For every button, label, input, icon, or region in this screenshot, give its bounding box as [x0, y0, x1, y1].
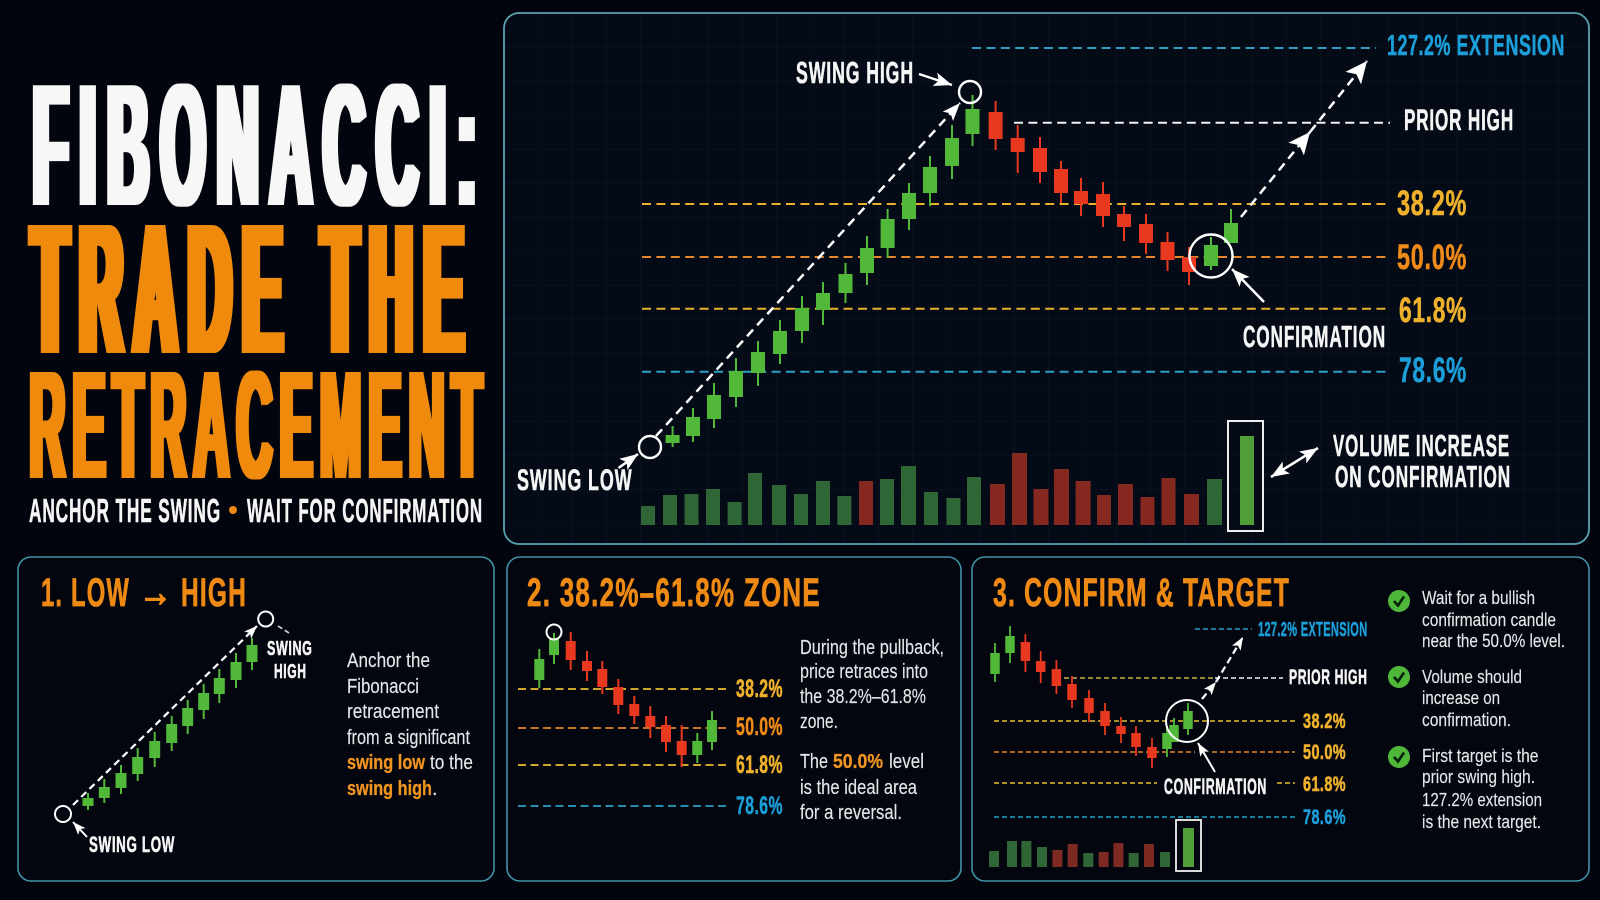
- swing high marker: SWING HIGH: [796, 55, 914, 90]
- text: TRADE THE: [32, 186, 475, 393]
- candlesticks: [673, 95, 1231, 447]
- candlesticks: [995, 626, 1188, 768]
- panel 3: confirm and target: [972, 557, 1589, 881]
- text: RETRACEMENT: [30, 339, 490, 511]
- level labels: [736, 675, 783, 820]
- description: swing high: [347, 778, 432, 800]
- check item 2: [1388, 666, 1522, 730]
- swing low marker: [517, 436, 661, 497]
- fibonacci level lines: [642, 48, 1390, 372]
- heading: →: [139, 571, 172, 615]
- text: FIBONACCI:: [33, 47, 488, 242]
- heading: 3. CONFIRM & TARGET: [993, 571, 1290, 615]
- level labels: 78.6%: [736, 792, 783, 820]
- dashed arrow: [73, 626, 257, 805]
- swing high marker: [546, 624, 562, 640]
- swing low marker: SWING LOW: [89, 832, 175, 857]
- description: to the: [430, 752, 473, 774]
- description: is the ideal area: [800, 777, 918, 799]
- checklist: [1388, 588, 1565, 832]
- level labels: 38.2%: [736, 675, 783, 703]
- level labels: 38.2%: [1303, 710, 1346, 733]
- confirmation marker: [1190, 234, 1386, 354]
- heading: HIGH: [181, 571, 247, 615]
- dashed arrow: confirmation to targets: [1241, 61, 1367, 217]
- candlesticks: [539, 632, 712, 767]
- description: [800, 637, 944, 824]
- swing high marker: SWING: [267, 638, 312, 660]
- level lines: [994, 629, 1295, 817]
- description: level: [889, 751, 924, 773]
- level labels: 127.2% EXTENSION: [1258, 619, 1368, 641]
- description: During the pullback,: [800, 637, 944, 659]
- description: swing low: [347, 752, 425, 774]
- description: retracement: [347, 701, 439, 723]
- check item 3: is the next target.: [1422, 812, 1541, 832]
- heading: 2. 38.2%–61.8% ZONE: [527, 571, 821, 615]
- level labels: [1258, 619, 1368, 829]
- swing high marker: HIGH: [274, 661, 306, 683]
- level labels: 50.0%: [1303, 741, 1346, 764]
- dashed arrow: swing low to swing high: [656, 103, 960, 436]
- description: the 38.2%–61.8%: [800, 686, 926, 708]
- swing low marker: [55, 806, 175, 857]
- confirmation label: CONFIRMATION: [1164, 774, 1267, 799]
- check item 3: [1388, 746, 1542, 832]
- swing high marker: [796, 55, 981, 103]
- description: price retraces into: [800, 661, 928, 683]
- description: 50.0%: [833, 751, 883, 773]
- level labels: 50.0%: [736, 713, 783, 741]
- heading: 1. LOW: [41, 571, 130, 615]
- check item 3: 127.2% extension: [1422, 790, 1542, 810]
- title: [30, 47, 490, 511]
- confirmation label: [1164, 743, 1267, 799]
- volume bars: [641, 421, 1263, 531]
- level labels: PRIOR HIGH: [1289, 666, 1368, 689]
- confirmation marker: CONFIRMATION: [1243, 319, 1386, 354]
- description: zone.: [800, 711, 838, 733]
- volume callout: [1271, 428, 1511, 494]
- description: [347, 650, 473, 800]
- check item 1: Wait for a bullish: [1422, 588, 1535, 608]
- swing low marker: SWING LOW: [517, 464, 632, 497]
- description: from a significant: [347, 727, 470, 749]
- check item 1: near the 50.0% level.: [1422, 631, 1565, 651]
- check item 3: First target is the: [1422, 746, 1538, 766]
- level lines: [518, 689, 727, 806]
- candlesticks: [88, 638, 252, 810]
- level labels: 61.8%: [1399, 291, 1467, 330]
- check item 2: increase on: [1422, 688, 1500, 708]
- check item 1: confirmation candle: [1422, 610, 1556, 630]
- description: .: [432, 778, 438, 800]
- description: for a reversal.: [800, 802, 902, 824]
- level labels: PRIOR HIGH: [1404, 104, 1514, 137]
- confirmation circle: [1166, 700, 1208, 742]
- panel: main chart: [504, 13, 1589, 544]
- level labels: 78.6%: [1399, 351, 1467, 390]
- highlighted volume bar: [1228, 421, 1263, 531]
- volume bars: [989, 820, 1201, 871]
- description: Fibonacci: [347, 676, 419, 698]
- level labels: [1387, 30, 1565, 390]
- subtitle: WAIT FOR CONFIRMATION: [247, 492, 483, 529]
- panel 2: retracement zone: [507, 557, 961, 881]
- level labels: 78.6%: [1303, 806, 1346, 829]
- check item 3: prior swing high.: [1422, 767, 1535, 787]
- level labels: 61.8%: [736, 751, 783, 779]
- check item 2: confirmation.: [1422, 710, 1511, 730]
- level labels: 50.0%: [1397, 238, 1467, 277]
- check item 2: Volume should: [1422, 667, 1522, 687]
- description: Anchor the: [347, 650, 430, 672]
- panel 1: low to high: [18, 557, 494, 881]
- subtitle: ANCHOR THE SWING: [29, 492, 221, 529]
- swing high marker: [258, 612, 312, 683]
- check item 1: [1388, 588, 1565, 651]
- level labels: 61.8%: [1303, 773, 1346, 796]
- level labels: 38.2%: [1397, 184, 1467, 223]
- description: The: [800, 751, 828, 773]
- dashed target arrows: [1202, 637, 1243, 699]
